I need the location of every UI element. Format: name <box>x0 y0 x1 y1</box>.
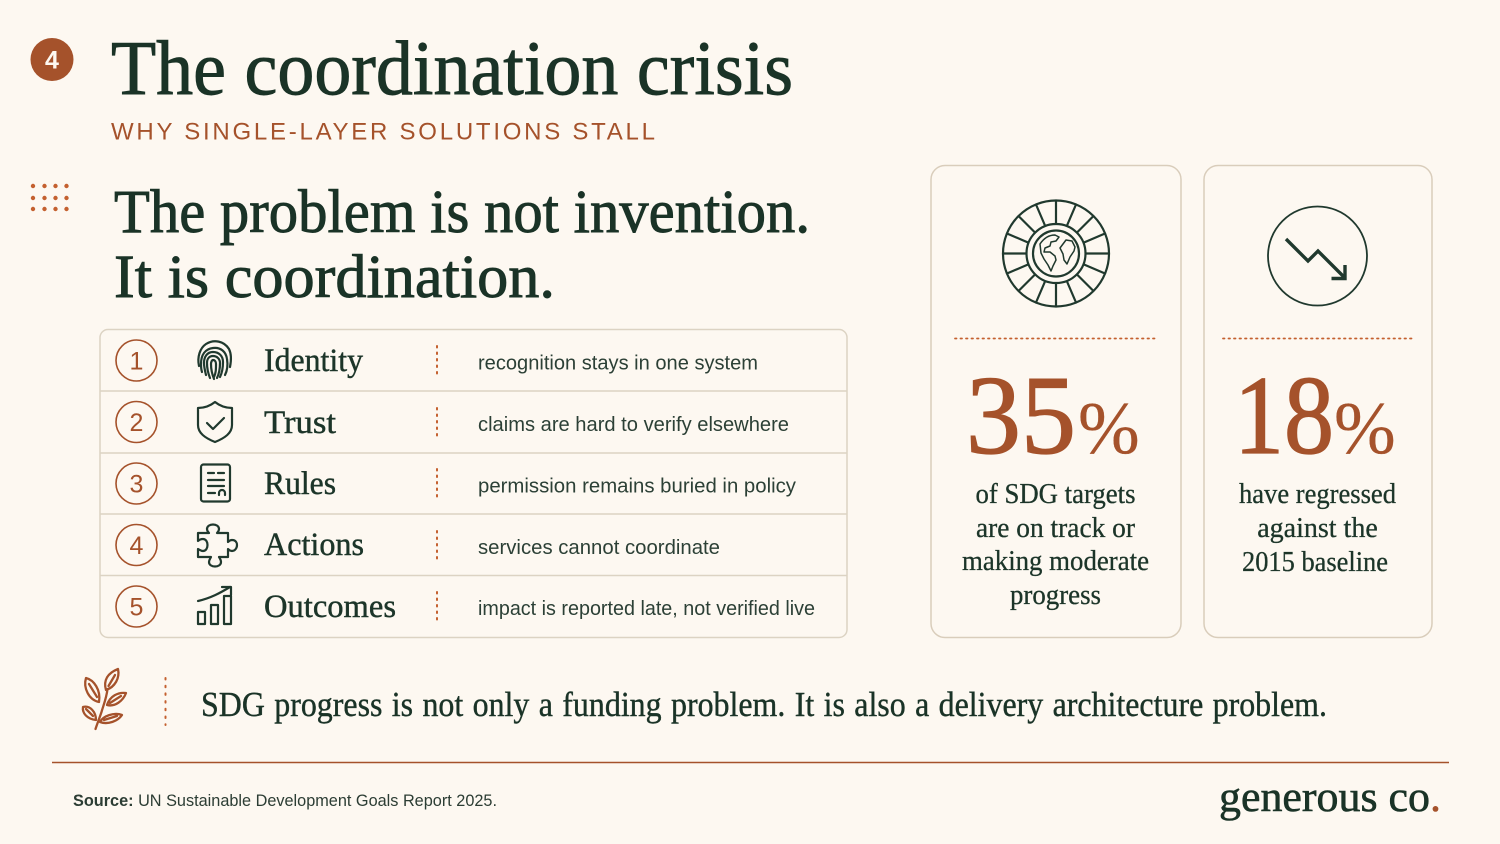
row 3: rules: 3 <box>130 470 143 498</box>
main heading <box>114 179 810 311</box>
panel: five layers table <box>100 330 847 638</box>
row 2: trust <box>116 402 789 442</box>
icon: shield with check <box>198 402 232 442</box>
icon: declining arrow in circle <box>1268 206 1367 306</box>
row 4: actions: 4 <box>130 532 144 560</box>
divider <box>1223 338 1412 340</box>
row 5: outcomes: 5 <box>130 594 143 622</box>
row 5: outcomes: impact is reported late, not verified live <box>478 597 815 620</box>
icon: globe in SDG wheel <box>1003 200 1109 306</box>
source note: Source: UN Sustainable Development Goals Report 2025. <box>73 792 497 810</box>
row 1: identity: Identity <box>264 343 363 379</box>
row 3: rules: Rules <box>264 466 336 502</box>
stat caption: against the <box>1257 513 1378 544</box>
row 3: rules: permission remains buried in policy <box>478 474 797 498</box>
icon: leaf sprig <box>83 669 126 729</box>
stat: 18%: 18% <box>1234 354 1396 478</box>
section number badge: 4 <box>45 46 59 74</box>
callout: SDG progress is not only a funding problem. It is also a delivery architecture problem. <box>201 686 1327 724</box>
stat caption: making moderate <box>962 546 1149 577</box>
footer rule <box>52 762 1449 764</box>
icon: puzzle piece <box>198 524 237 566</box>
icon: rising bar chart <box>198 587 231 624</box>
row 2: trust: claims are hard to verify elsewhere <box>478 413 789 436</box>
title: The coordination crisis <box>111 25 793 111</box>
decorative dot grid icon <box>31 184 69 211</box>
row 2: trust: Trust <box>264 405 336 441</box>
subtitle: WHY SINGLE-LAYER SOLUTIONS STALL <box>111 118 655 146</box>
stat caption: progress <box>1010 580 1101 611</box>
stat caption: are on track or <box>976 513 1136 544</box>
stat caption: of SDG targets <box>976 479 1136 510</box>
row 5: outcomes: Outcomes <box>264 589 396 625</box>
stat caption: have regressed <box>1239 479 1396 510</box>
icon: policy document <box>201 464 230 502</box>
row 1: identity: recognition stays in one system <box>478 352 758 374</box>
section number badge <box>30 38 74 81</box>
stat caption: 2015 baseline <box>1242 547 1388 578</box>
divider <box>955 338 1157 340</box>
stat caption <box>1239 479 1396 578</box>
divider: vertical dots <box>164 678 166 725</box>
row 5: outcomes <box>116 586 815 627</box>
row 3: rules <box>116 463 797 504</box>
stat: 35%: 35% <box>966 354 1140 478</box>
row 2: trust: 2 <box>130 409 143 437</box>
panel: 35% stat card <box>931 166 1181 638</box>
panel: 18% stat card <box>1204 166 1432 638</box>
main heading: The problem is not invention. <box>114 179 810 246</box>
main heading: It is coordination. <box>114 244 555 311</box>
row 4: actions: services cannot coordinate <box>478 536 720 559</box>
row 4: actions <box>116 524 720 566</box>
row 1: identity <box>116 340 758 381</box>
icon: fingerprint <box>198 341 231 379</box>
stat caption <box>962 479 1149 611</box>
logo: generous co. <box>1219 774 1441 821</box>
row 1: identity: 1 <box>130 348 143 376</box>
row 4: actions: Actions <box>264 527 364 563</box>
